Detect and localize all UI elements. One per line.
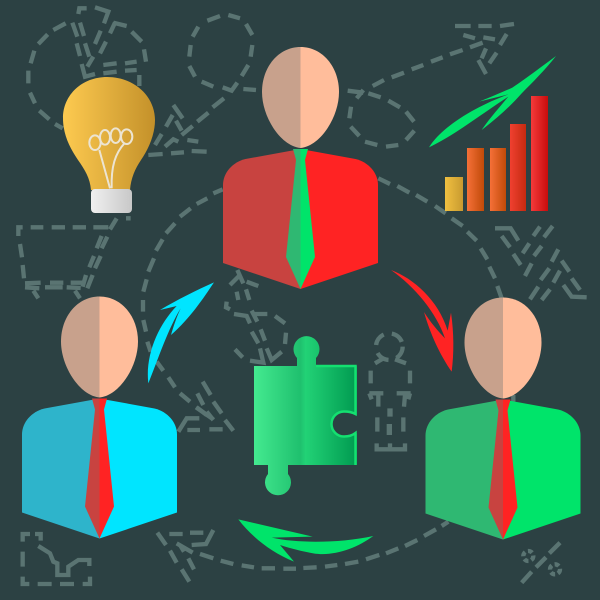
torso	[426, 400, 580, 540]
icon: puzzle piece	[254, 336, 357, 495]
bulb glass	[63, 77, 155, 190]
doodles: top left quadrant	[18, 7, 258, 300]
doodles: bottom right quadrant	[303, 333, 560, 583]
puzzle bright edge	[316, 366, 356, 465]
puzzle body	[254, 336, 357, 495]
doodles: top right quadrant	[348, 24, 587, 300]
bar 1	[445, 177, 463, 211]
head	[61, 296, 138, 398]
tie	[85, 398, 114, 538]
person: right, green shirt	[426, 298, 580, 540]
person: top, green tie	[223, 47, 378, 289]
bar chart	[445, 96, 548, 211]
tie	[488, 400, 518, 540]
arrow: red top to right	[391, 270, 453, 372]
arrow: cyan left to top	[148, 282, 214, 383]
torso	[22, 398, 177, 538]
icon: light bulb	[63, 77, 155, 213]
person: left, blue shirt	[22, 296, 177, 538]
head	[262, 47, 339, 148]
torso	[223, 149, 378, 289]
arrow: green right to left	[238, 519, 373, 562]
arrow: green growth arrow	[429, 56, 556, 147]
bar 4	[510, 124, 526, 211]
bulb filament	[89, 128, 132, 188]
bulb base	[91, 189, 132, 213]
tie	[286, 149, 315, 289]
doodles: bottom left quadrant	[23, 300, 296, 584]
head	[464, 298, 542, 398]
bar 5	[531, 96, 548, 211]
bar 3	[490, 148, 506, 211]
bar 2	[467, 148, 484, 211]
